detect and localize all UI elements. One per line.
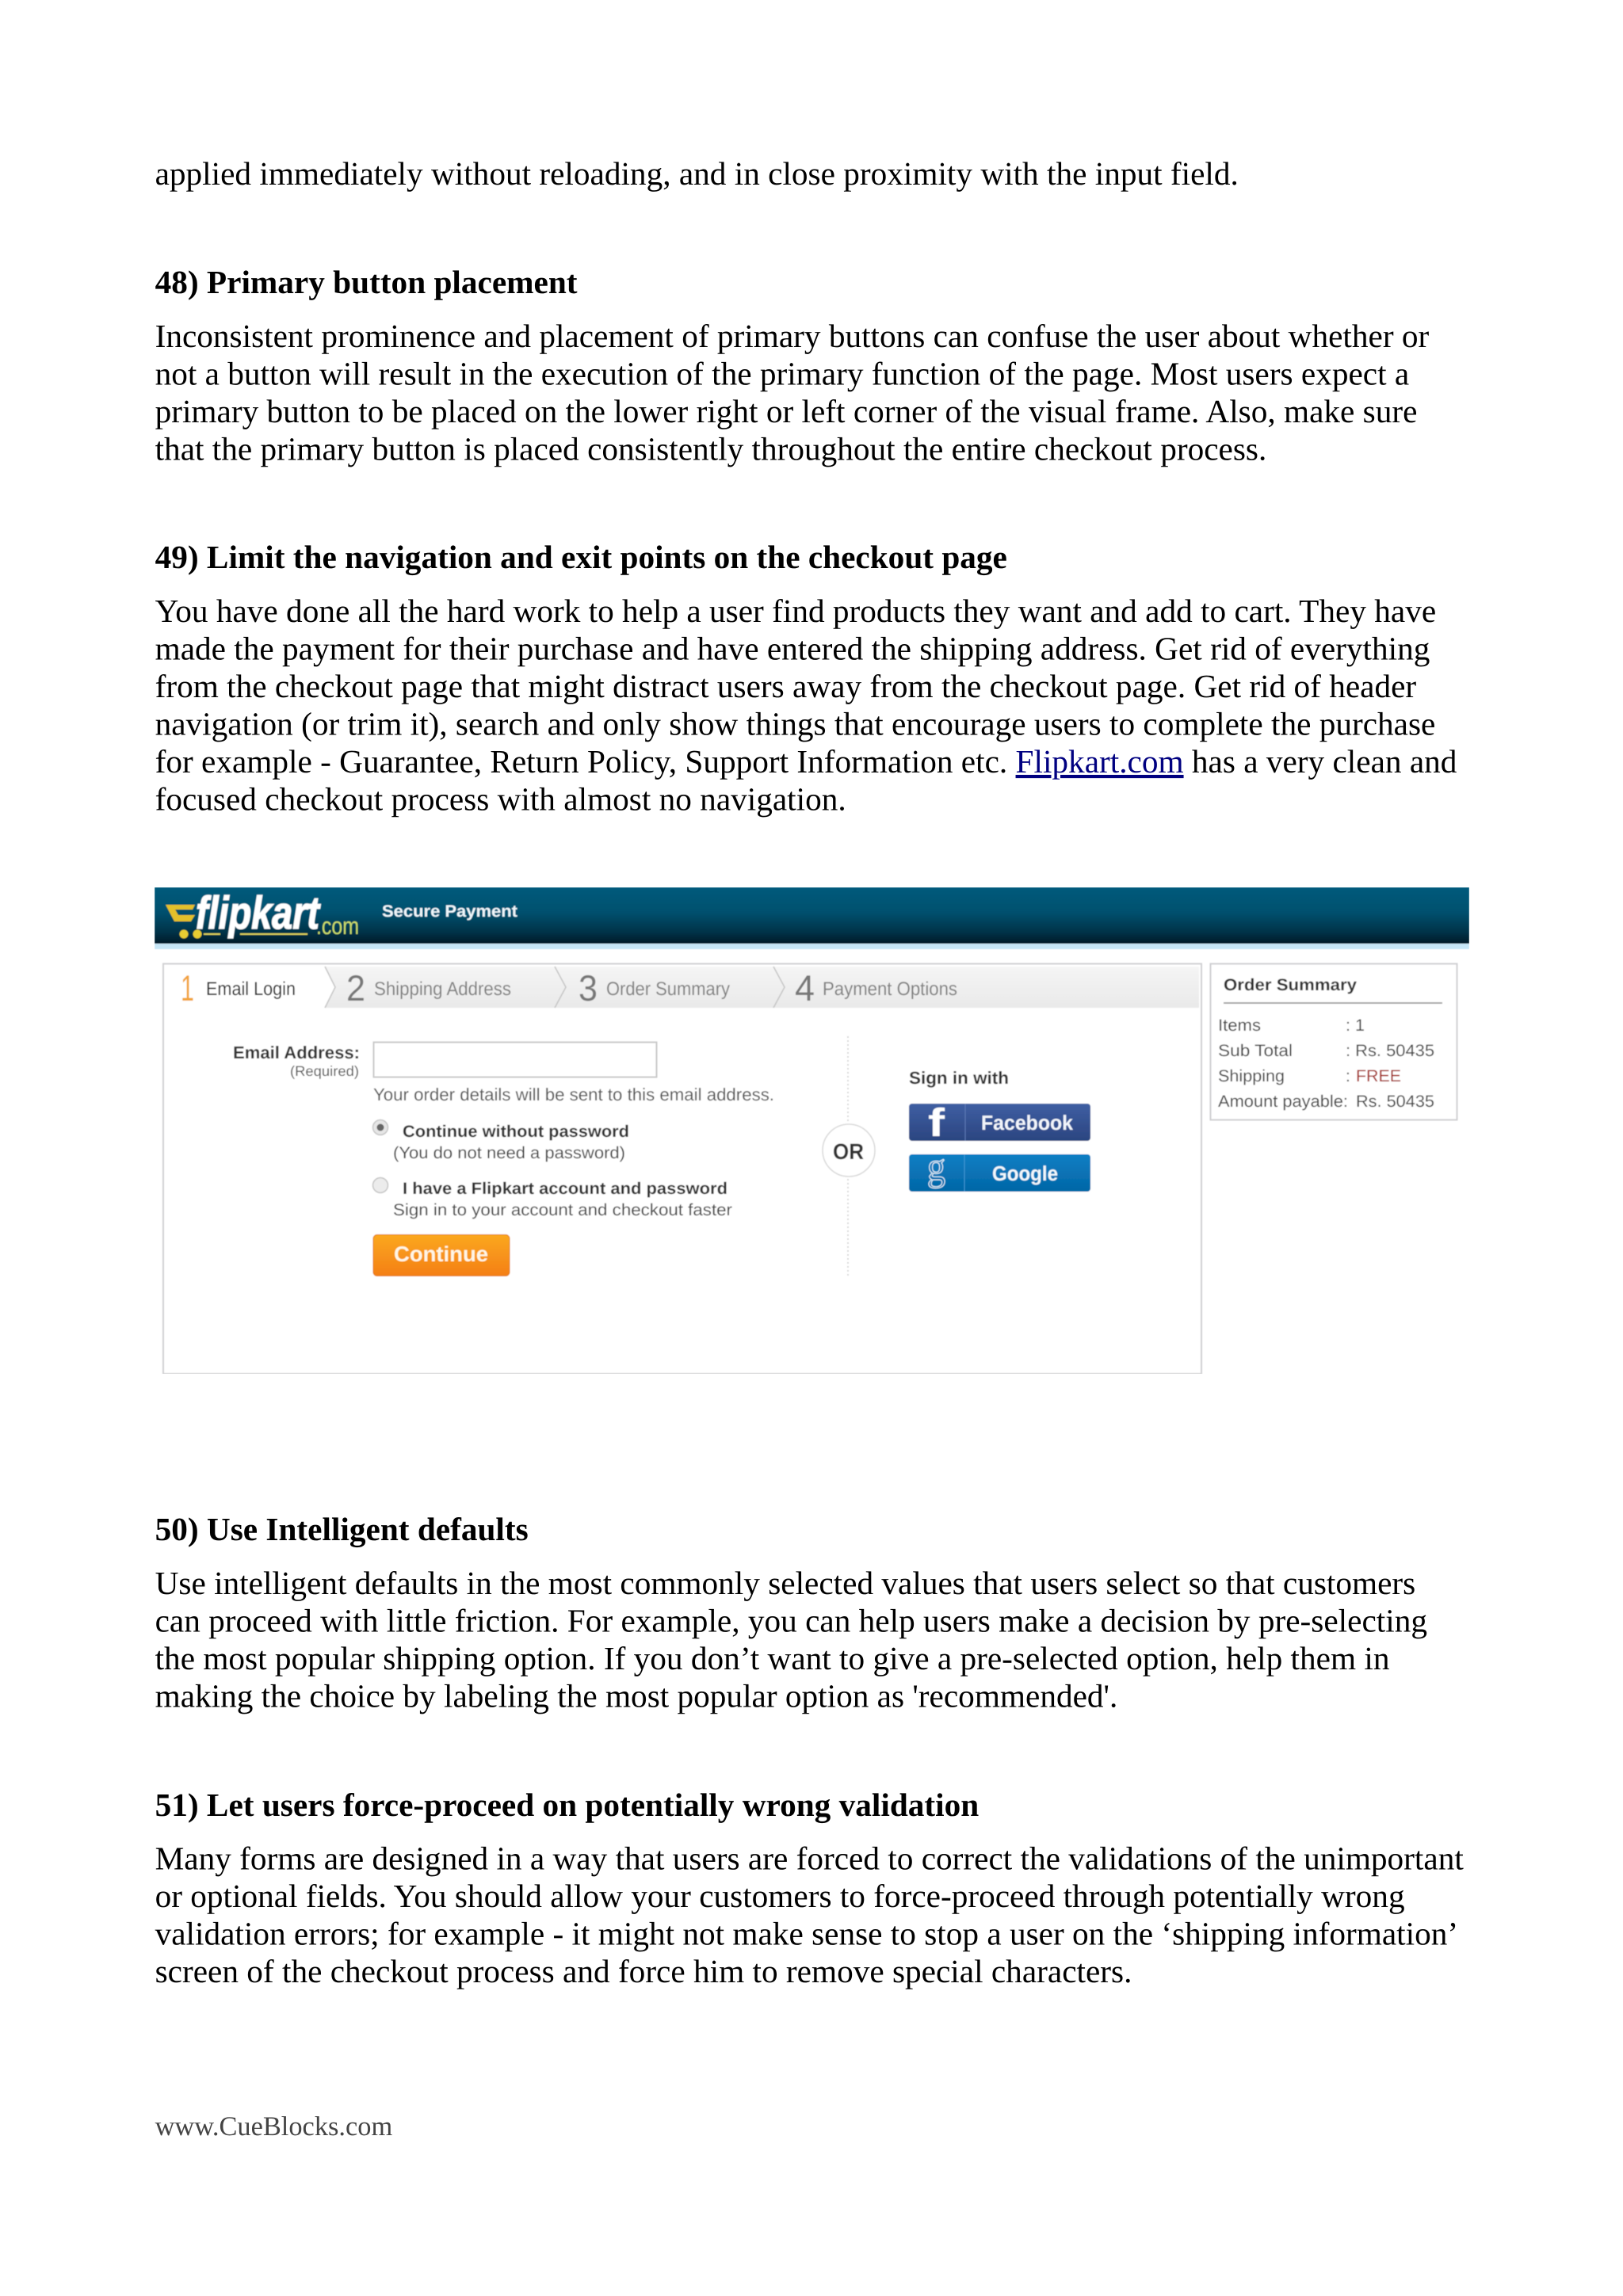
screenshot: Flipkart checkout page	[155, 887, 1469, 1374]
text block: section 49 body: navigation (or trim it), search and only show things that encourage users to complete the purchase	[155, 705, 1435, 742]
panel: checkout form	[163, 963, 1201, 1374]
button: Google	[909, 1144, 1090, 1192]
email field	[233, 1043, 774, 1104]
panel: order summary	[1211, 963, 1457, 1120]
button: Facebook: Facebook	[981, 1111, 1074, 1135]
step bar: Shipping Address	[374, 978, 511, 1000]
option: have account: Sign in to your account and checkout faster	[393, 1201, 732, 1219]
panel: order summary: :	[1346, 1067, 1350, 1085]
OR divider	[823, 1036, 875, 1277]
step bar: 2	[346, 967, 365, 1009]
panel: order summary: Items	[1218, 1016, 1261, 1035]
sign in with	[909, 1068, 1090, 1192]
step bar: 3	[579, 967, 598, 1009]
step bar: Payment Options	[823, 978, 957, 1000]
option: continue without password: Continue without password	[403, 1123, 629, 1141]
text block: section 51 body	[155, 1840, 1464, 1989]
panel: order summary: Sub Total	[1218, 1042, 1293, 1060]
heading: 50 Use Intelligent defaults: 50) Use Intelligent defaults	[155, 1511, 529, 1548]
text block: section 48 body: Inconsistent prominence and placement of primary buttons can confuse the user about whether or	[155, 318, 1430, 354]
option: have account: I have a Flipkart account and password	[403, 1180, 727, 1198]
text block: section 51 body: Many forms are designed in a way that users are forced to correct the validations of the unimportant	[155, 1840, 1464, 1876]
button: Continue	[373, 1234, 510, 1276]
step bar: Order Summary	[606, 978, 730, 1000]
step bar: Email Login	[206, 978, 296, 1000]
option: continue without password	[372, 1120, 629, 1162]
email field: Your order details will be sent to this email address.	[373, 1085, 774, 1104]
header bar	[155, 887, 1469, 949]
step bar: 1	[181, 967, 194, 1009]
text block: section 51 body: validation errors; for example - it might not make sense to stop a user on the ‘shipping information’	[155, 1916, 1458, 1952]
text block: section 50 body: can proceed with little friction. For example, you can help users make a decision by pre-selecting	[155, 1602, 1427, 1638]
text block: section 49 body: from the checkout page that might distract users away from the checkout page. Get rid of header	[155, 668, 1416, 704]
text block: section 48 body: primary button to be placed on the lower right or left corner of the visual frame. Also, make sure	[155, 393, 1417, 429]
text block: section 48 body	[155, 318, 1430, 467]
text block: section 50 body: the most popular shipping option. If you don’t want to give a pre-selected option, help them in	[155, 1640, 1390, 1676]
icon: Flipkart logo: flipkart	[196, 887, 321, 939]
panel: order summary: Shipping	[1218, 1067, 1285, 1085]
text block: section 50 body	[155, 1565, 1427, 1714]
option: have account	[372, 1177, 732, 1219]
heading: 48 Primary button placement: 48) Primary button placement	[155, 264, 578, 300]
text block: section 48 body: that the primary button is placed consistently throughout the entire checkout process.	[155, 431, 1266, 467]
OR divider: OR	[833, 1139, 864, 1164]
email field: (Required)	[290, 1063, 359, 1079]
text block: section 49 body: focused checkout process with almost no navigation.	[155, 781, 846, 818]
button: Google: g	[927, 1144, 945, 1188]
heading: 49 Limit the navigation: 49) Limit the navigation and exit points on the checkout page	[155, 539, 1007, 576]
email field: Email Address:	[233, 1043, 360, 1062]
button: Google: Google	[992, 1161, 1058, 1185]
text block: section 51 body: screen of the checkout process and force him to remove special characters.	[155, 1953, 1132, 1989]
panel: order summary: Amount payable:	[1218, 1093, 1348, 1111]
text block: section 48 body: not a button will result in the execution of the primary function of the page. Most users expect a	[155, 355, 1409, 391]
panel: order summary: FREE	[1356, 1067, 1401, 1085]
text block: section 51 body: or optional fields. You should allow your customers to force-proceed through potentially wrong	[155, 1878, 1405, 1914]
button: Continue: Continue	[394, 1242, 488, 1266]
step bar	[181, 967, 1199, 1009]
label: Secure Payment: Secure Payment	[382, 902, 517, 921]
button: Facebook: f	[928, 1100, 945, 1145]
sign in with: Sign in with	[909, 1068, 1009, 1088]
heading: 51 Let users force-proceed: 51) Let users force-proceed on potentially wrong validation	[155, 1787, 979, 1824]
text block: section 50 body: Use intelligent defaults in the most commonly selected values that users select so that customers	[155, 1565, 1415, 1601]
panel: order summary: Rs. 50435	[1356, 1093, 1434, 1111]
text block: carried-over line: applied immediately without reloading, and in close proximity with the input field.	[155, 155, 1239, 192]
icon: Flipkart logo: .com	[316, 913, 359, 940]
text block: section 49 body: You have done all the hard work to help a user find products they want and add to cart. They have	[155, 593, 1436, 629]
button: Facebook	[909, 1100, 1090, 1145]
panel: order summary: : 1	[1346, 1016, 1365, 1035]
text block: section 50 body: making the choice by labeling the most popular option as 'recommended'.	[155, 1678, 1117, 1714]
text block: section 49 body: for example - Guarantee, Return Policy, Support Information etc. Flipkart.com has a very clean and	[155, 743, 1457, 780]
step bar: 4	[795, 967, 815, 1009]
panel: order summary: Order Summary	[1224, 976, 1357, 994]
text block: section 49 body	[155, 593, 1457, 818]
footer: website: www.CueBlocks.com	[155, 2111, 392, 2142]
text block: section 49 body: made the payment for their purchase and have entered the shipping address. Get rid of everything	[155, 631, 1430, 667]
option: continue without password: (You do not need a password)	[393, 1144, 625, 1162]
panel: order summary: : Rs. 50435	[1346, 1042, 1434, 1060]
